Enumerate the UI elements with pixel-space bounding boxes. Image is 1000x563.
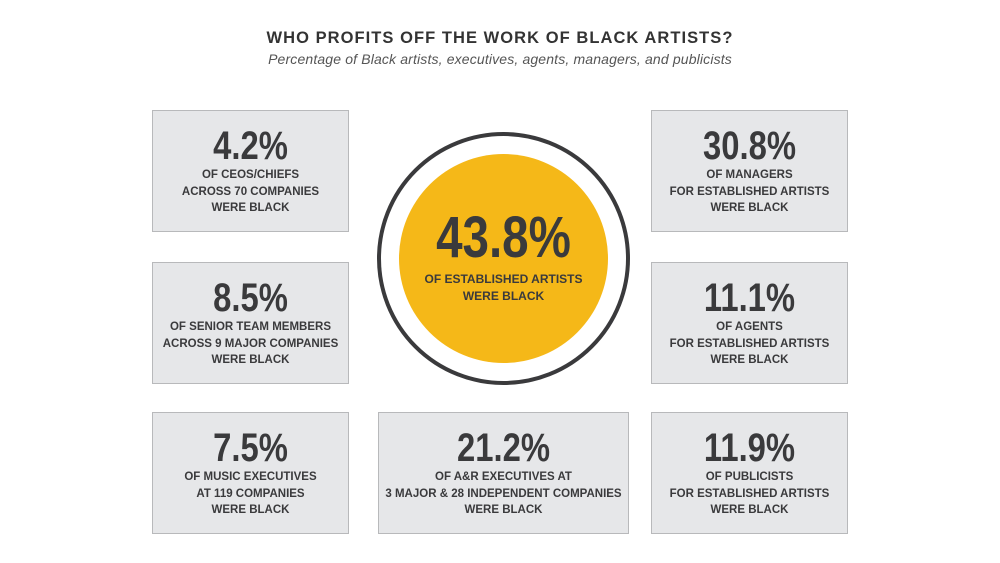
panel: agents [651,262,848,384]
panel: publicists: WERE BLACK [711,504,788,516]
panel: A&R executives: 3 MAJOR & 28 INDEPENDENT COMPANIES [385,488,622,500]
panel: publicists: OF PUBLICISTS [706,471,793,483]
panel: managers: OF MANAGERS [706,169,793,181]
circle: established artists [377,132,630,385]
panel: publicists: 11.9% [704,426,795,470]
panel: managers [651,110,848,232]
panel: managers: FOR ESTABLISHED ARTISTS [670,186,829,198]
panel: managers: WERE BLACK [711,202,788,214]
panel: CEOs: 4.2% [213,124,288,168]
panel: CEOs: ACROSS 70 COMPANIES [182,186,319,198]
panel: music executives: OF MUSIC EXECUTIVES [184,471,317,483]
panel: A&R executives: 21.2% [457,426,550,470]
panel: A&R executives: OF A&R EXECUTIVES AT [435,471,572,483]
panel: agents: OF AGENTS [716,321,783,333]
subtitle: Percentage of Black artists, executives, agents, managers, and publicists [268,51,732,67]
panel: senior team: ACROSS 9 MAJOR COMPANIES [163,338,338,350]
panel: music executives [152,412,349,534]
panel: senior team: 8.5% [213,276,288,320]
circle: established artists: OF ESTABLISHED ARTISTS [424,272,582,286]
panel: agents: 11.1% [704,276,795,320]
panel: managers: 30.8% [703,124,796,168]
panel: senior team: OF SENIOR TEAM MEMBERS [170,321,331,333]
panel: CEOs: WERE BLACK [212,202,289,214]
panel: agents: FOR ESTABLISHED ARTISTS [670,338,829,350]
panel: A&R executives: WERE BLACK [465,504,542,516]
panel: A&R executives [378,412,629,534]
panel: senior team: WERE BLACK [212,354,289,366]
panel: CEOs: OF CEOS/CHIEFS [202,169,299,181]
panel: senior team [152,262,349,384]
panel: publicists [651,412,848,534]
panel: music executives: AT 119 COMPANIES [196,488,305,500]
panel: music executives: 7.5% [213,426,288,470]
circle: established artists: 43.8% [436,205,571,270]
title: WHO PROFITS OFF THE WORK OF BLACK ARTISTS? [267,29,733,47]
panel: music executives: WERE BLACK [212,504,289,516]
panel: CEOs [152,110,349,232]
panel: publicists: FOR ESTABLISHED ARTISTS [670,488,829,500]
circle: established artists: WERE BLACK [463,288,544,302]
panel: agents: WERE BLACK [711,354,788,366]
